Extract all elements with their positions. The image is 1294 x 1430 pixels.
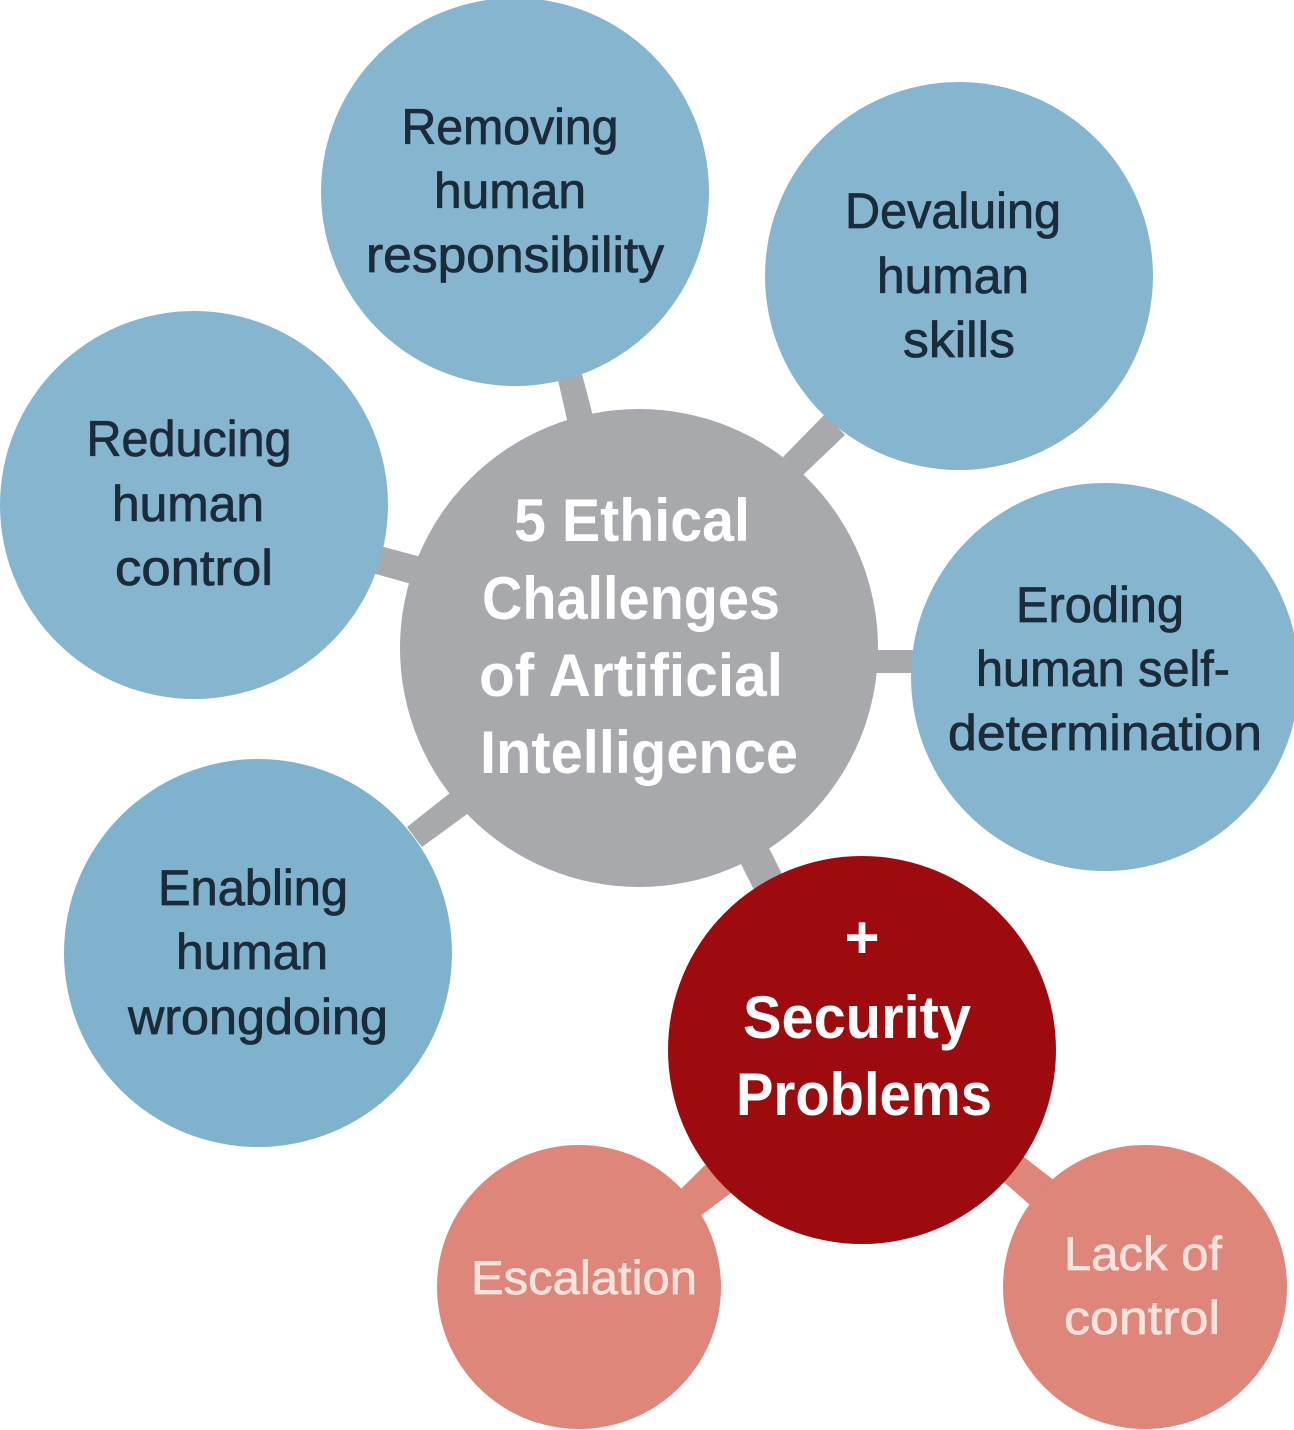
bubble: enabling human wrongdoing: Enabling — [158, 860, 348, 916]
center circle: 5 ethical challenges: Intelligence — [480, 719, 798, 786]
center circle: 5 ethical challenges: of Artificial — [479, 642, 783, 709]
bubble: lack of control: Lack of — [1064, 1227, 1223, 1280]
bubble: devaluing human skills: human — [877, 248, 1029, 304]
bubble: enabling human wrongdoing: wrongdoing — [127, 989, 388, 1045]
bubble: lack of control: control — [1064, 1291, 1220, 1344]
bubble: devaluing human skills — [765, 82, 1153, 470]
circle: security problems: Security — [743, 984, 972, 1051]
bubble: removing human responsibility: Removing — [402, 99, 618, 155]
bubble: devaluing human skills: skills — [903, 312, 1015, 368]
bubble: eroding human self-determination — [911, 483, 1294, 871]
circle: security problems: Problems — [736, 1061, 992, 1128]
bubble: lack of control — [1003, 1145, 1287, 1429]
bubble: eroding human self-determination: human self- — [976, 641, 1230, 697]
bubble: reducing human control: Reducing — [86, 411, 292, 467]
bubble: eroding human self-determination: Eroding — [1016, 577, 1184, 633]
circle: security problems: + — [844, 904, 880, 971]
bubble: devaluing human skills: Devaluing — [845, 183, 1061, 239]
bubble: escalation: Escalation — [471, 1251, 697, 1304]
bubble: enabling human wrongdoing — [64, 759, 452, 1147]
bubble: removing human responsibility: human — [434, 163, 586, 219]
circle: security problems — [668, 856, 1056, 1244]
bubble: removing human responsibility — [321, 0, 709, 386]
bubble: removing human responsibility: responsibility — [366, 227, 664, 283]
center circle: 5 ethical challenges: Challenges — [482, 565, 780, 632]
center circle: 5 ethical challenges: 5 Ethical — [514, 487, 750, 554]
bubble: reducing human control: human — [112, 476, 264, 532]
connectors between circles — [372, 374, 1060, 1220]
bubble: reducing human control: control — [115, 540, 273, 596]
bubble: eroding human self-determination: determination — [948, 705, 1262, 761]
bubble: reducing human control — [0, 311, 388, 699]
center circle: 5 ethical challenges — [400, 409, 878, 887]
bubble: enabling human wrongdoing: human — [176, 924, 328, 980]
bubble: escalation — [437, 1145, 721, 1429]
